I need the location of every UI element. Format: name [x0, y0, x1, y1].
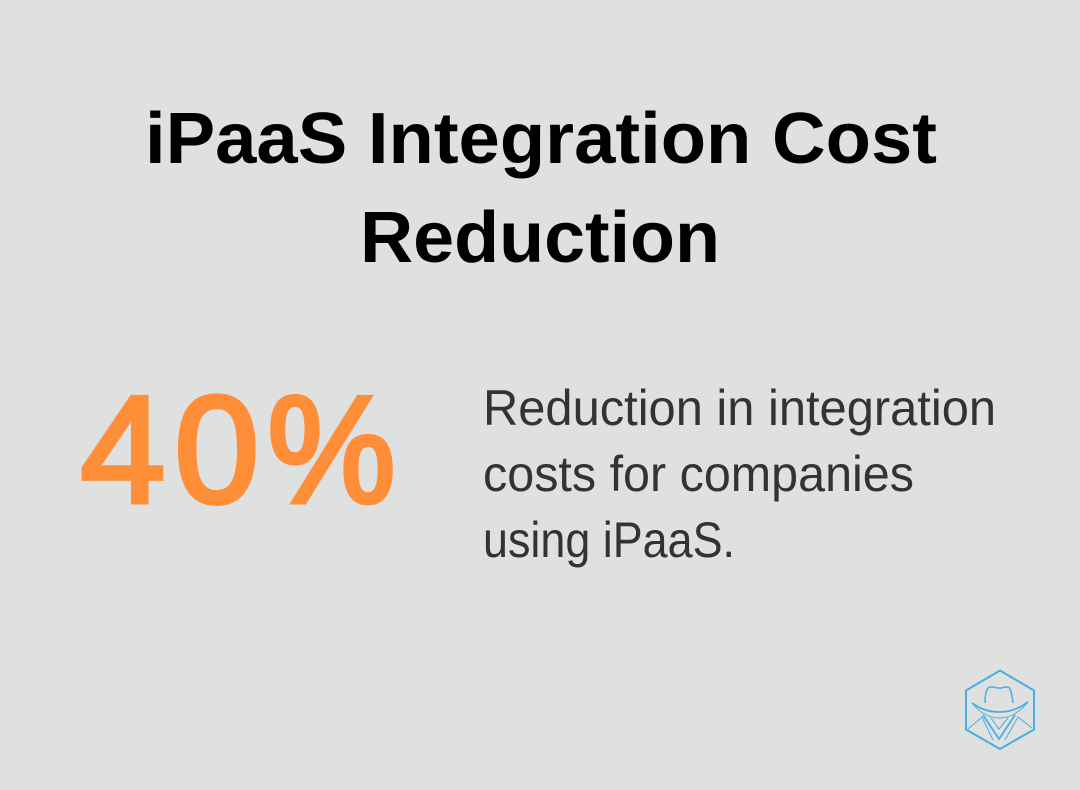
title: iPaaS Integration Cost — [145, 99, 937, 179]
big statistic: 40%: % — [268, 365, 396, 535]
icon: spy logo in hexagon — [966, 670, 1034, 749]
big statistic: 40%: 4 — [81, 365, 165, 535]
description text: Reduction in integration — [483, 380, 996, 436]
description text: costs for companies — [483, 446, 914, 502]
description text: using iPaaS. — [483, 512, 735, 568]
title — [145, 99, 937, 278]
title: Reduction — [360, 198, 720, 278]
big statistic: 40%: 0 — [174, 365, 259, 535]
big statistic: 40% — [81, 365, 395, 535]
description text — [483, 380, 996, 568]
